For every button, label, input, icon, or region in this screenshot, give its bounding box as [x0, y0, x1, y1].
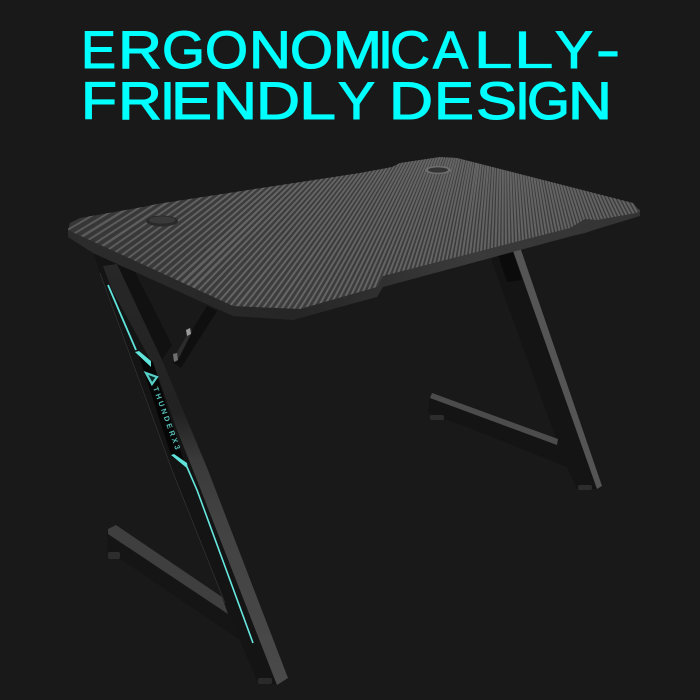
title: S: [476, 72, 517, 131]
cyan chevron lower: [171, 454, 188, 469]
title: N: [568, 72, 612, 131]
cyan light strip upper: [108, 285, 136, 350]
title: L: [473, 21, 513, 80]
title: I: [160, 72, 175, 131]
desk front edge: [68, 210, 640, 320]
title: N: [249, 21, 291, 80]
rear brace of left leg: [117, 265, 217, 368]
title: M: [333, 21, 382, 80]
title: C: [390, 21, 430, 80]
title: Y: [555, 21, 593, 80]
title: O: [290, 21, 333, 80]
title: E: [171, 72, 212, 131]
title: D: [256, 72, 300, 131]
left leg pad: [258, 678, 272, 684]
desk top surface: [68, 157, 640, 309]
thin outline: [100, 273, 225, 603]
title: I: [378, 21, 393, 80]
title: Y: [338, 72, 375, 131]
left foot: [107, 525, 256, 680]
title: I: [515, 72, 530, 131]
cyan light strip lower: [187, 467, 253, 643]
title: G: [527, 72, 570, 131]
title: A: [433, 21, 469, 80]
left leg: [94, 254, 288, 685]
desk: [68, 157, 640, 320]
right leg bracket shadow: [497, 249, 522, 282]
right foot pads: [430, 415, 592, 490]
title: -: [596, 21, 620, 80]
title: E: [81, 21, 116, 80]
title: G: [162, 21, 205, 80]
title: D: [389, 72, 433, 131]
cyan chevron upper: [135, 351, 151, 367]
dark face: [94, 254, 288, 685]
right leg: [428, 247, 602, 490]
left foot pad: [108, 552, 120, 559]
title: E: [434, 72, 474, 131]
title: L: [513, 21, 554, 80]
title: F: [81, 72, 117, 131]
title: L: [299, 72, 336, 131]
brand text: THUNDERX3: [151, 386, 182, 451]
title: R: [118, 21, 162, 80]
title: [81, 21, 620, 131]
title: R: [118, 72, 162, 131]
black logo band: [137, 350, 184, 462]
right foot lit edge: [430, 393, 558, 445]
title: N: [213, 72, 257, 131]
cable grommet left: [146, 216, 178, 226]
logo triangle: [146, 373, 157, 384]
beam lit face: [103, 264, 288, 685]
right leg lit edge: [512, 247, 602, 489]
left foot lit edge: [108, 525, 228, 614]
cable grommet right: [425, 166, 451, 174]
title: O: [205, 21, 248, 80]
